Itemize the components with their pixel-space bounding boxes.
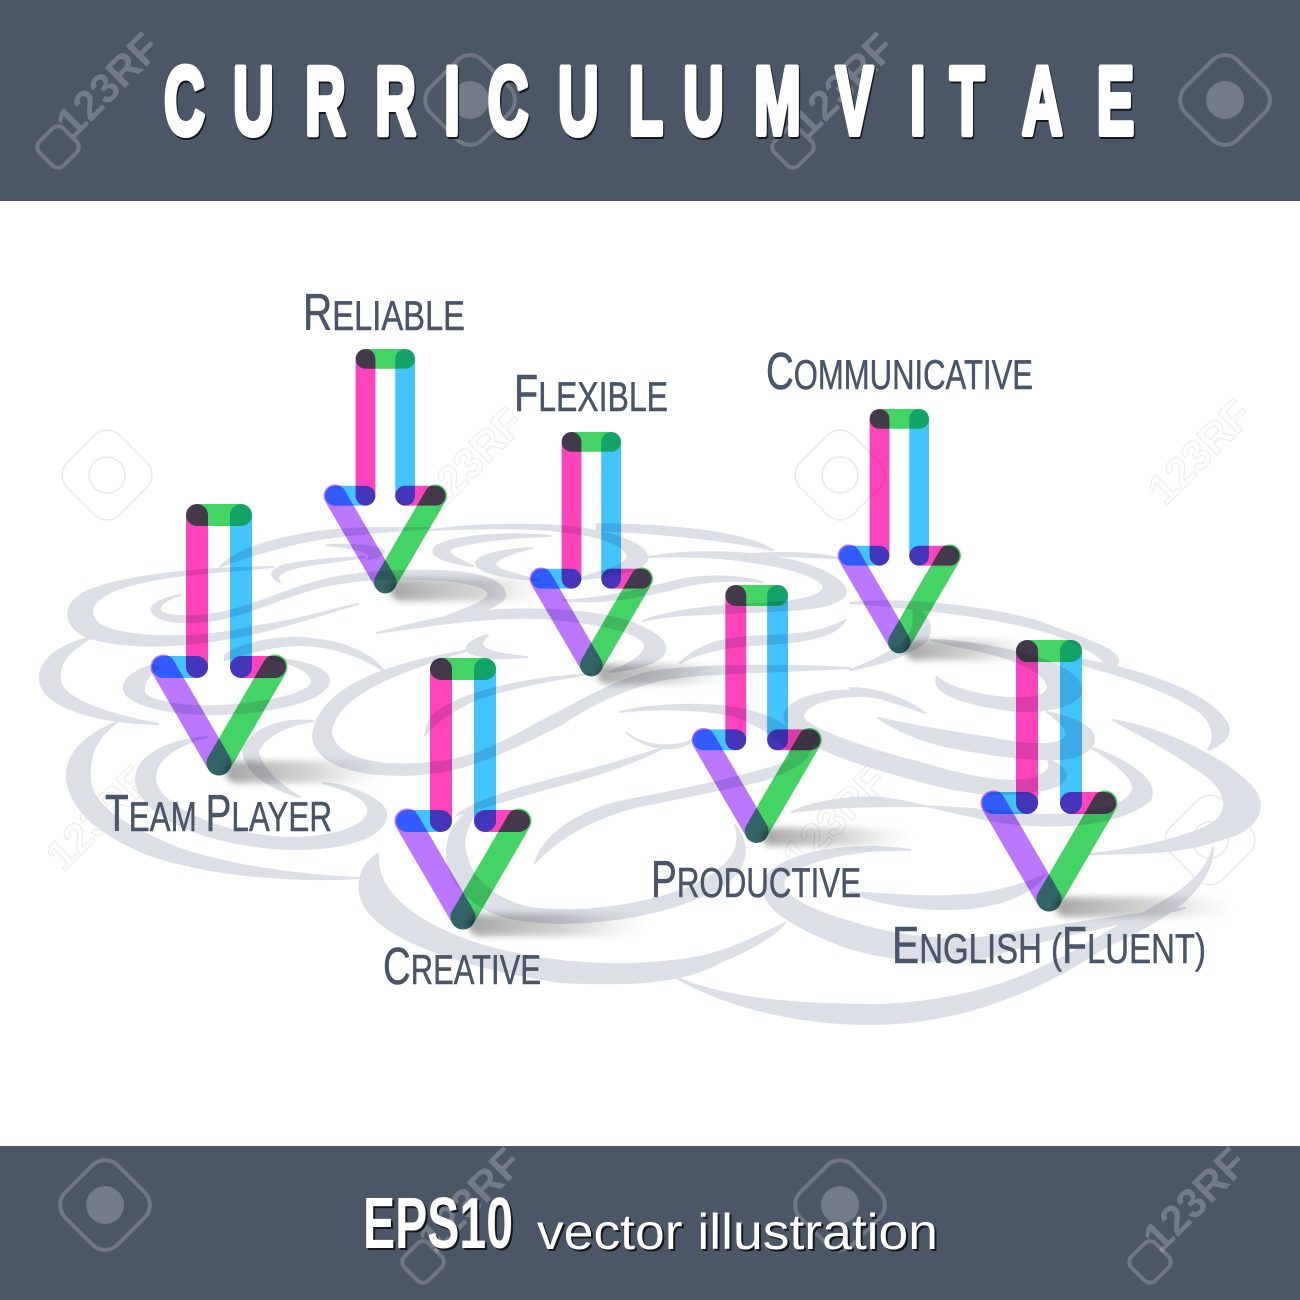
arrow: Team Player (163, 515, 275, 763)
arrow floor shadows (225, 579, 1235, 936)
label: English (Fluent): ENGLISH (FLUENT) (892, 917, 1206, 975)
label: Communicative: COMMUNICATIVE (766, 343, 1033, 401)
watermarks on white area: 123RF (774, 757, 896, 879)
watermarks on white area: 123RF (1139, 391, 1261, 513)
arrow: Productive (703, 595, 810, 831)
footer watermarks: 123RF (409, 1139, 531, 1261)
label: Reliable: RELIABLE (303, 284, 465, 342)
arrow: Communicative (849, 419, 950, 642)
label: Team Player: TEAM PLAYER (105, 785, 332, 843)
header watermarks: 123RF (782, 24, 904, 146)
header watermarks (34, 24, 1277, 171)
footer text: EPS10: EPS10 (363, 1184, 513, 1264)
footer watermarks (53, 1139, 1256, 1286)
arrow: Creative (407, 669, 519, 917)
watermarks on white area: 123RF (411, 399, 533, 521)
brain illustration made of swirls (40, 524, 1260, 1024)
arrow: Reliable (335, 359, 436, 582)
header band (0, 0, 1300, 201)
footer watermarks: 123RF (1134, 1139, 1256, 1261)
label: Flexible: FLEXIBLE (514, 365, 668, 423)
footer text: vector illustration: vector illustration (537, 1204, 938, 1260)
arrow: English (Fluent) (993, 651, 1105, 899)
title: CURRICULUM VITAE (164, 46, 1134, 155)
watermarks on white area: 123RF (37, 757, 159, 879)
header watermarks: 123RF (47, 24, 169, 146)
watermarks on white area (37, 391, 1262, 892)
label: Creative: CREATIVE (383, 938, 541, 996)
label: Productive: PRODUCTIVE (651, 851, 861, 909)
arrow: Flexible (541, 442, 642, 665)
footer band (0, 1139, 1300, 1300)
